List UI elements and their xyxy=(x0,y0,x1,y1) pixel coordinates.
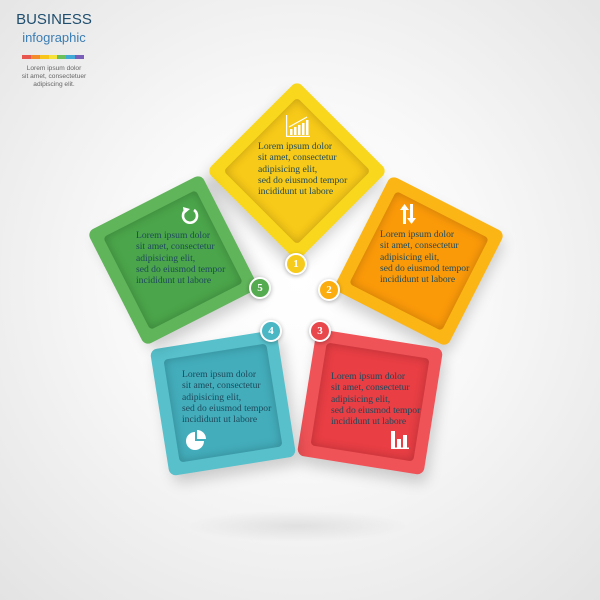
floor shadow xyxy=(185,510,410,542)
badge 1: 1 xyxy=(293,258,299,270)
text: green: Lorem ipsum dolor xyxy=(136,230,210,241)
text: orange: sit amet, consectetur xyxy=(380,240,459,251)
text: yellow: sit amet, consectetur xyxy=(258,152,337,163)
title: infographic xyxy=(22,30,86,45)
text: blue: sit amet, consectetur xyxy=(182,380,261,391)
icon: refresh xyxy=(182,207,198,224)
text: yellow: adipisicing elit, xyxy=(258,164,317,175)
panel: orange square xyxy=(333,175,505,347)
badge 5: 5 xyxy=(257,282,263,294)
badge 2: 2 xyxy=(326,284,332,296)
text: orange: adipisicing elit, xyxy=(380,252,439,263)
text: yellow: Lorem ipsum dolor xyxy=(258,141,332,152)
text: green: adipisicing elit, xyxy=(136,253,195,264)
panel: yellow square xyxy=(206,80,388,262)
subtitle text: adipiscing elit. xyxy=(33,81,75,88)
text: orange xyxy=(380,229,470,285)
text: red: adipisicing elit, xyxy=(331,394,390,405)
panel: green square xyxy=(87,174,259,346)
text: blue: sed do eiusmod tempor xyxy=(182,403,271,414)
icon: bar chart xyxy=(391,431,409,449)
text: blue xyxy=(182,369,272,425)
text: yellow: sed do eiusmod tempor xyxy=(258,175,347,186)
panel: blue square xyxy=(150,330,296,476)
badge 4: 4 xyxy=(268,325,274,337)
text: yellow xyxy=(258,141,348,197)
text: orange: sed do eiusmod tempor xyxy=(380,263,469,274)
badge 3 xyxy=(309,320,331,342)
text: green: sed do eiusmod tempor xyxy=(136,264,225,275)
text: red: sed do eiusmod tempor xyxy=(331,405,420,416)
text: blue: adipisicing elit, xyxy=(182,392,241,403)
panel: red square xyxy=(297,329,443,475)
text: orange: Lorem ipsum dolor xyxy=(380,229,454,240)
text: orange: incididunt ut labore xyxy=(380,274,455,285)
text: green xyxy=(136,230,226,286)
title: BUSINESS xyxy=(16,11,92,28)
badge 4 xyxy=(260,320,282,342)
text: red: Lorem ipsum dolor xyxy=(331,371,405,382)
color bar xyxy=(22,55,84,59)
text: blue: incididunt ut labore xyxy=(182,414,257,425)
badge 1 xyxy=(285,253,307,275)
subtitle text: sit amet, consectetuer xyxy=(22,73,86,80)
text: yellow: incididunt ut labore xyxy=(258,186,333,197)
icon: growth chart xyxy=(286,115,310,137)
icon: pie chart xyxy=(186,430,206,450)
text: green: sit amet, consectetur xyxy=(136,241,215,252)
badge 2 xyxy=(318,279,340,301)
subtitle text: Lorem ipsum dolor xyxy=(27,65,81,72)
text: red xyxy=(331,371,420,427)
subtitle text xyxy=(22,65,86,88)
text: red: incididunt ut labore xyxy=(331,416,406,427)
badge 3: 3 xyxy=(317,325,323,337)
text: red: sit amet, consectetur xyxy=(331,382,410,393)
text: green: incididunt ut labore xyxy=(136,275,211,286)
badge 5 xyxy=(249,277,271,299)
text: blue: Lorem ipsum dolor xyxy=(182,369,256,380)
title xyxy=(16,11,92,45)
icon: up-down arrows xyxy=(400,204,416,224)
